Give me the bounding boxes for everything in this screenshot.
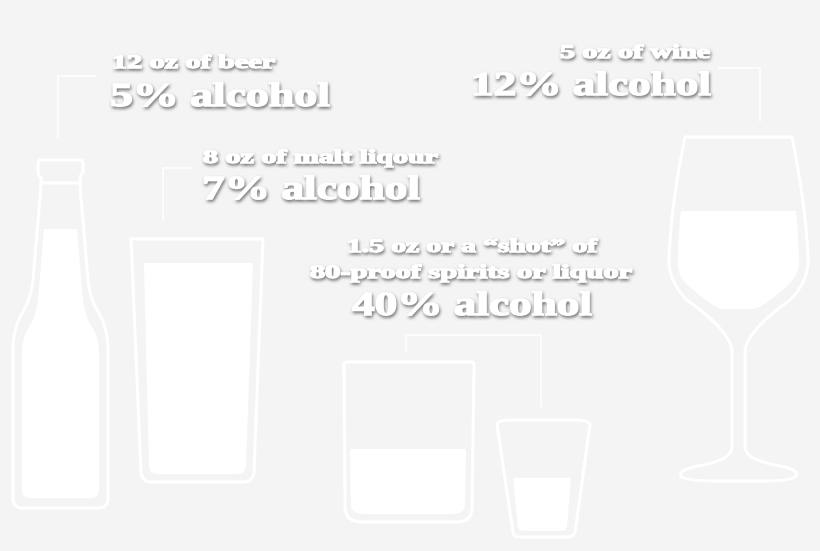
wine label [471,42,711,103]
malt liquor label [202,147,439,207]
malt liquor label: 7% alcohol [202,170,420,207]
beer label: 12 oz of beer [112,52,276,73]
malt liquor label: 8 oz of malt liqour [203,147,439,168]
spirits label [310,236,633,323]
beer label: 5% alcohol [110,77,330,114]
connector: wine [718,68,760,122]
connector: beer [58,76,96,138]
spirits label: 40% alcohol [352,286,592,323]
icon: rocks glass [344,362,474,522]
connector: malt [163,168,192,222]
wine label: 12% alcohol [471,66,711,103]
icon: wine glass [669,137,808,481]
connector: spirits [406,335,541,407]
wine label: 5 oz of wine [560,42,710,63]
icon: beer bottle [13,160,108,508]
icon: pint glass [131,239,263,482]
beer label [110,52,330,114]
spirits label: 80-proof spirits or liquor [310,262,633,283]
icon: shot glass [497,420,590,537]
spirits label: 1.5 oz or a “shot” of [347,236,598,257]
